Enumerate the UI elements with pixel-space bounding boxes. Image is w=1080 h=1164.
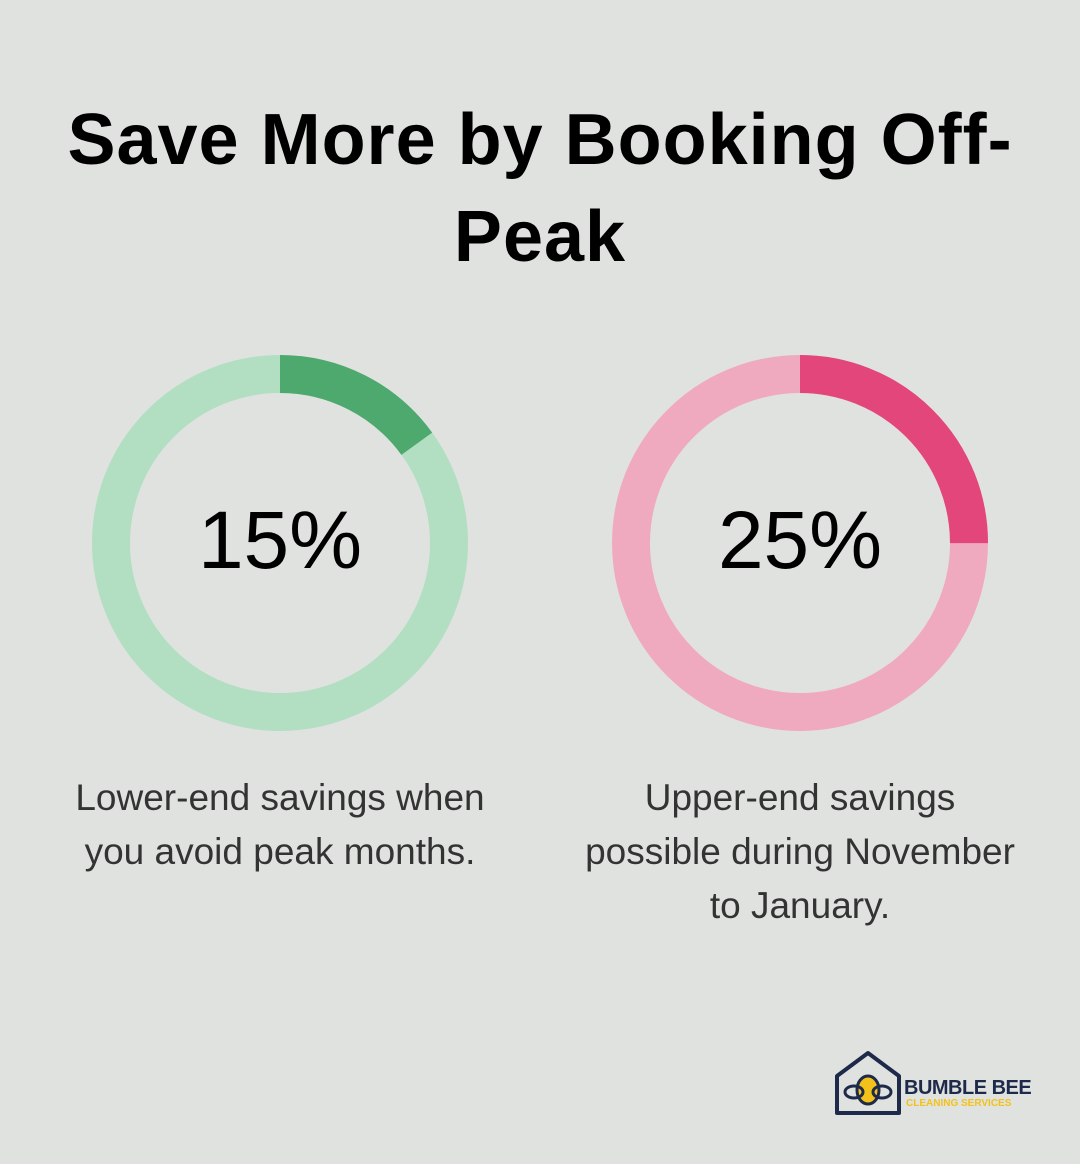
title	[67, 100, 1013, 277]
title: Peak	[454, 197, 626, 277]
caption left	[75, 777, 485, 872]
logo: CLEANING SERVICES	[906, 1098, 1011, 1109]
title: Save More by Booking Off-	[67, 100, 1013, 180]
caption right: possible during November	[585, 831, 1015, 872]
chart: donut 15%	[92, 355, 468, 731]
logo	[835, 1051, 1031, 1115]
caption right	[585, 777, 1015, 926]
caption right: to January.	[710, 885, 890, 926]
logo: BUMBLE BEE	[904, 1077, 1031, 1099]
chart: donut 25%	[612, 355, 988, 731]
caption right: Upper-end savings	[645, 777, 955, 818]
chart: donut 25%: 25%	[718, 495, 882, 586]
caption left: you avoid peak months.	[85, 831, 475, 872]
caption left: Lower-end savings when	[75, 777, 485, 818]
chart: donut 15%: 15%	[198, 495, 362, 586]
